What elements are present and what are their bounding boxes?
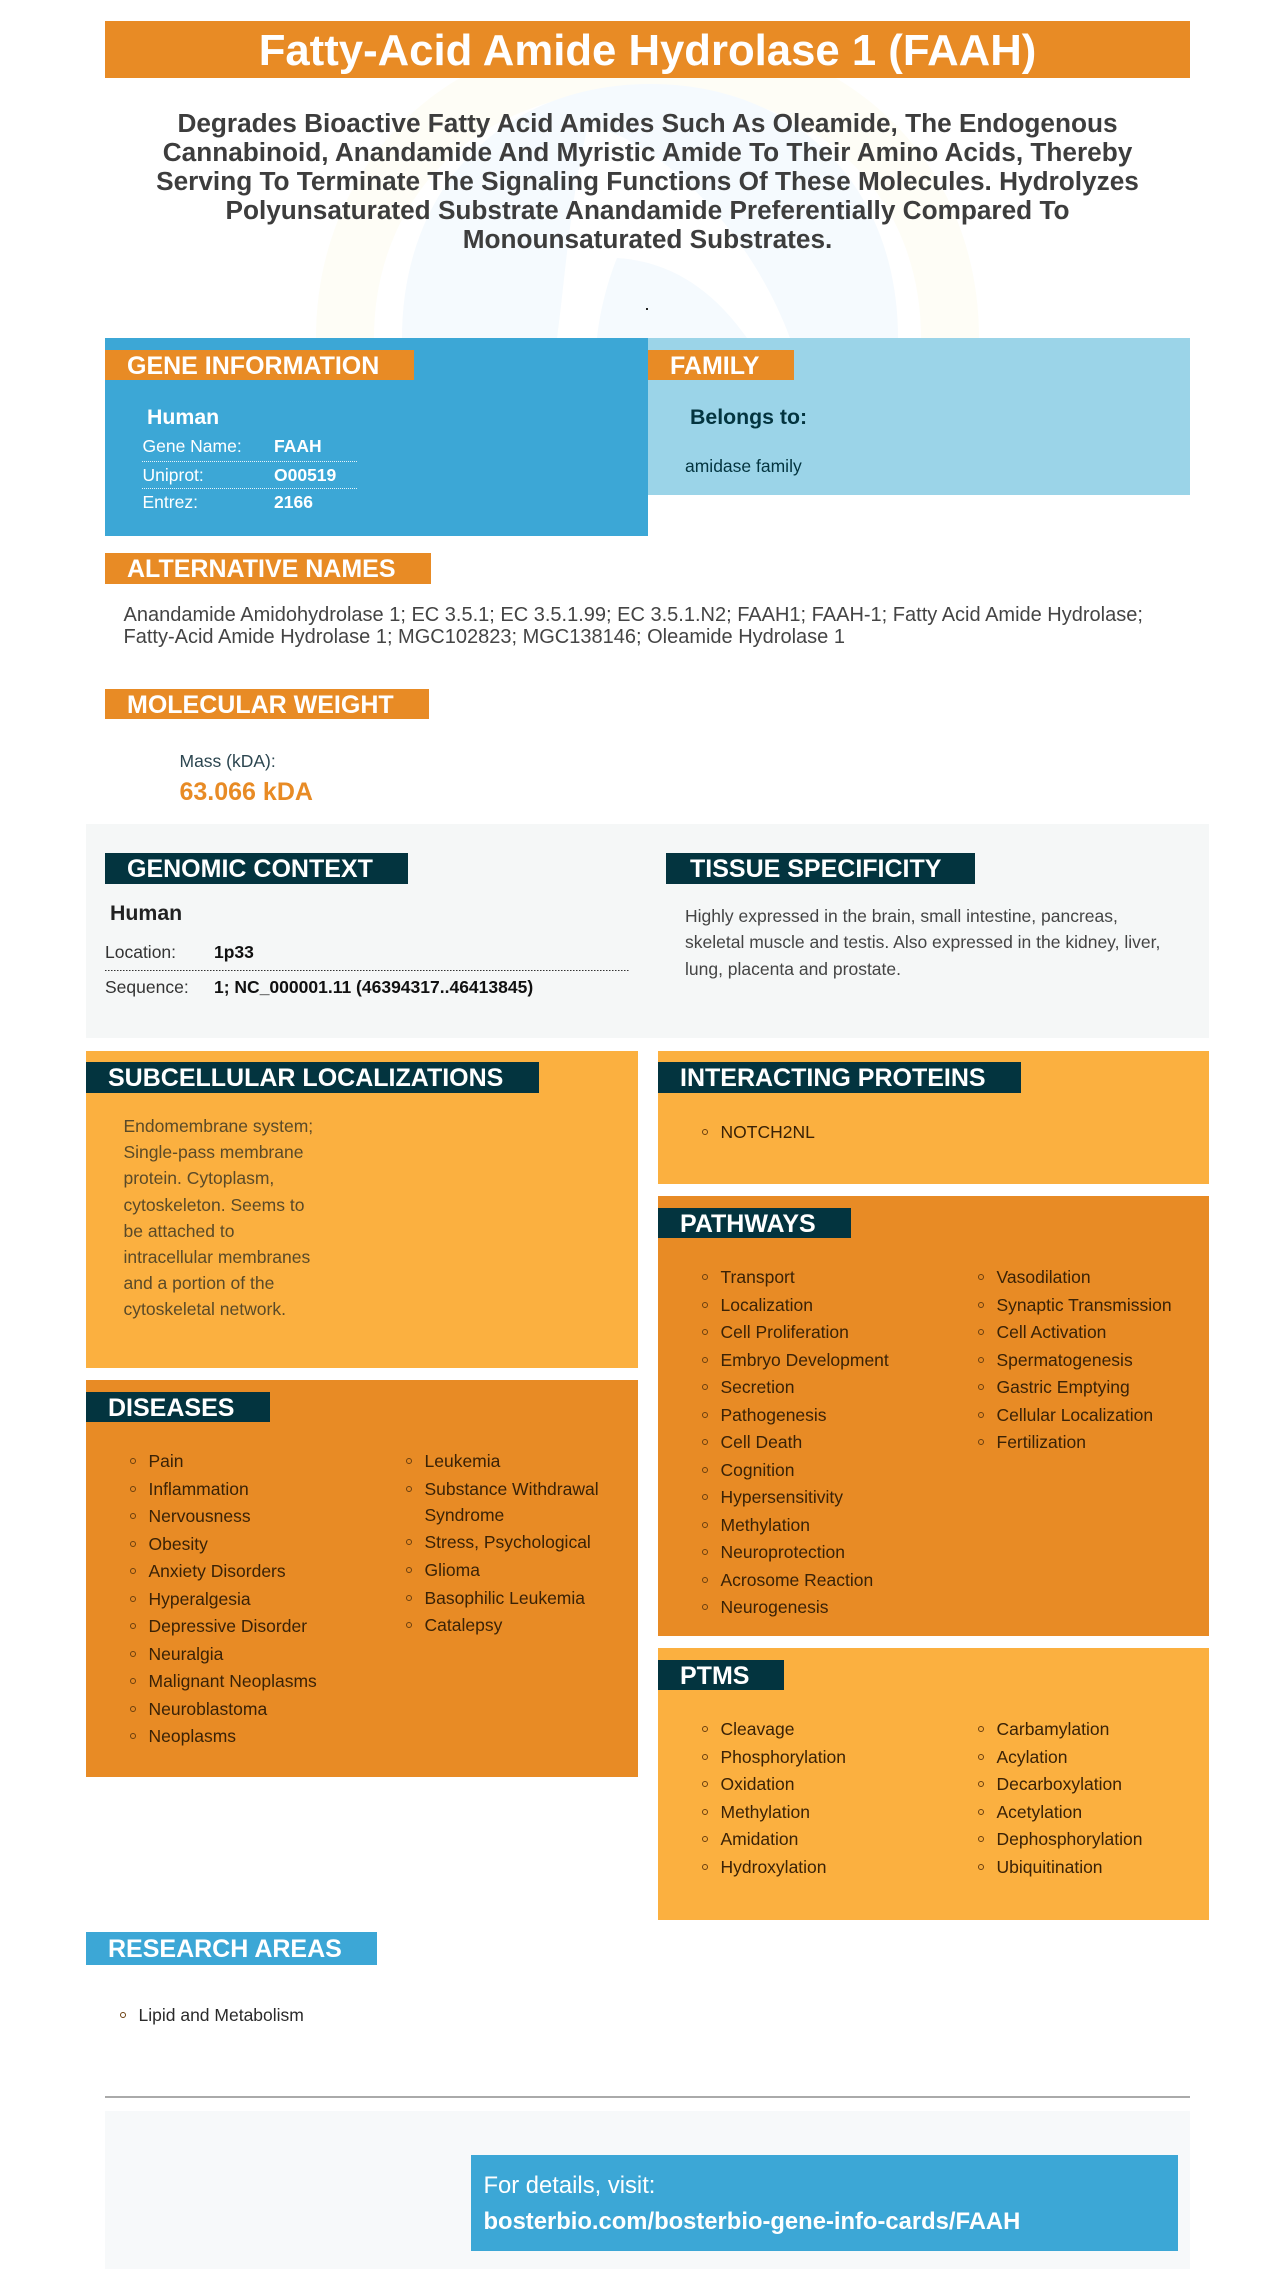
entrez row (142, 492, 313, 512)
alternative names text: Anandamide Amidohydrolase 1; EC 3.5.1; EC 3.5.1.99; EC 3.5.1.N2; FAAH1; FAAH-1; Fatty Acid Amide Hydrolase; (124, 604, 1143, 626)
diseases list column 2: Stress, Psychological (424, 1532, 591, 1552)
diseases list column 1: Neuroblastoma (148, 1698, 267, 1718)
pathways list column 1: Cell Death (720, 1432, 802, 1452)
diseases list column 1: Malignant Neoplasms (148, 1671, 317, 1691)
uniprot row: O00519 (274, 465, 336, 485)
description: Cannabinoid, Anandamide And Myristic Amide To Their Amino Acids, Thereby (163, 136, 1132, 166)
diseases list column 1: Inflammation (148, 1478, 249, 1498)
pathways list column 2: Cellular Localization (996, 1404, 1153, 1424)
panel: family (648, 338, 1190, 495)
pathways list column 2: Gastric Emptying (996, 1377, 1130, 1397)
heading: pathways (658, 1208, 851, 1238)
subcellular text: Single-pass membrane (124, 1142, 303, 1162)
diseases list column 2: Substance Withdrawal (424, 1478, 599, 1498)
ptms list column 1: Methylation (720, 1802, 810, 1822)
subcellular text (124, 1116, 313, 1319)
ptms list column 1: Hydroxylation (720, 1856, 827, 1876)
ptms list column 2: Decarboxylation (996, 1774, 1122, 1794)
pathways list column 1: Transport (720, 1267, 795, 1287)
link text: bosterbio.com/bosterbio-gene-info-cards/FAAH (484, 2208, 1020, 2235)
diseases list column 1: Depressive Disorder (148, 1616, 307, 1636)
alternative names text (124, 604, 1143, 648)
mass value: 63.066 kDA (180, 778, 313, 806)
heading: molecular weight: MOLECULAR WEIGHT (127, 690, 394, 718)
pathways list column 1: Pathogenesis (720, 1404, 827, 1424)
pathways list column 1: Methylation (720, 1514, 810, 1534)
panel: gene information (105, 338, 648, 536)
subcellular text: be attached to (124, 1221, 234, 1241)
gene name row (142, 436, 322, 456)
panel: diseases (86, 1380, 638, 1777)
heading: alternative names: ALTERNATIVE NAMES (127, 554, 396, 582)
sequence row: 1; NC_000001.11 (46394317..46413845) (214, 977, 533, 997)
ptms list column 2 (978, 1719, 1142, 1876)
description: Degrades Bioactive Fatty Acid Amides Such As Oleamide, The Endogenous (177, 108, 1118, 138)
diseases list column 1: Pain (148, 1451, 184, 1471)
ptms list column 1: Phosphorylation (720, 1746, 846, 1766)
heading: diseases (86, 1392, 270, 1422)
description (156, 108, 1139, 254)
pathways list column 2: Vasodilation (996, 1267, 1091, 1287)
diseases list column 2: Glioma (424, 1560, 480, 1580)
interacting list: NOTCH2NL (720, 1122, 815, 1142)
sequence row: Sequence: (105, 977, 189, 997)
subcellular text: cytoskeleton. Seems to (124, 1195, 304, 1215)
heading: tissue specificity: TISSUE SPECIFICITY (690, 854, 941, 882)
heading: family: FAMILY (670, 352, 759, 380)
ptms list column 1: Amidation (720, 1829, 798, 1849)
uniprot row (142, 465, 336, 485)
pathways list column 2: Synaptic Transmission (996, 1294, 1172, 1314)
pathways list column 1: Neurogenesis (720, 1597, 828, 1617)
subcellular text: intracellular membranes (124, 1247, 310, 1267)
research areas list: Lipid and Metabolism (138, 2005, 304, 2025)
diseases list column 1: Neuralgia (148, 1644, 223, 1664)
entrez row: 2166 (274, 492, 313, 512)
pathways list column 2 (978, 1267, 1172, 1452)
tissue text: skeletal muscle and testis. Also expressed in the kidney, liver, (685, 932, 1160, 952)
dot (646, 308, 648, 310)
diseases list column 1: Hyperalgesia (148, 1588, 251, 1608)
location row: 1p33 (214, 942, 254, 962)
pathways list column 1: Localization (720, 1294, 813, 1314)
diseases list column 1: Neoplasms (148, 1726, 236, 1746)
uniprot row: Uniprot: (142, 465, 204, 485)
heading: genomic context: GENOMIC CONTEXT (127, 854, 373, 882)
alternative names text: Fatty-Acid Amide Hydrolase 1; MGC102823; MGC138146; Oleamide Hydrolase 1 (124, 626, 845, 648)
gene name row: FAAH (274, 436, 322, 456)
panel: interacting proteins (658, 1051, 1209, 1184)
heading: subcellular localizations: SUBCELLULAR LOCALIZATIONS (108, 1064, 503, 1092)
ptms list column 2: Acylation (996, 1746, 1068, 1766)
diseases list column 1: Nervousness (148, 1506, 251, 1526)
diseases list column 2 (406, 1451, 599, 1635)
panel: footer (105, 2111, 1190, 2269)
description: Polyunsaturated Substrate Anandamide Preferentially Compared To (225, 194, 1070, 224)
pathways list column 1: Secretion (720, 1377, 794, 1397)
diseases list column 2: Leukemia (424, 1451, 500, 1471)
panel: subcellular localizations (86, 1051, 638, 1368)
pathways list column 1: Neuroprotection (720, 1542, 845, 1562)
panel: pathways (658, 1196, 1209, 1636)
ptms list column 1: Oxidation (720, 1774, 794, 1794)
title: Fatty-Acid Amide Hydrolase 1 (FAAH) (259, 26, 1036, 75)
heading: diseases: DISEASES (108, 1394, 234, 1422)
location row: Location: (105, 942, 176, 962)
pathways list column 2: Fertilization (996, 1432, 1086, 1452)
pathways list column 2: Spermatogenesis (996, 1350, 1133, 1370)
pathways list column 1 (702, 1267, 889, 1617)
pathways list column 1: Cognition (720, 1460, 794, 1480)
gene name row: Gene Name: (142, 436, 242, 456)
subcellular text: cytoskeletal network. (124, 1299, 286, 1319)
description: Monounsaturated Substrates. (463, 224, 832, 254)
ptms list column 1 (702, 1719, 846, 1876)
subcellular text: protein. Cytoplasm, (124, 1168, 274, 1188)
tissue text: lung, placenta and prostate. (685, 959, 901, 979)
pathways list column 1: Hypersensitivity (720, 1487, 843, 1507)
ptms list column 2: Acetylation (996, 1802, 1082, 1822)
diseases list column 1: Anxiety Disorders (148, 1561, 286, 1581)
subcellular text: and a portion of the (124, 1273, 274, 1293)
call to action: For details, visit: (484, 2172, 655, 2199)
panel: genomic context and tissue specificity (86, 824, 1209, 1038)
pathways list column 1: Cell Proliferation (720, 1322, 849, 1342)
diseases list column 2: Syndrome (424, 1504, 504, 1524)
diseases list column 1 (130, 1451, 317, 1746)
heading: ptms (658, 1660, 784, 1690)
ptms list column 2: Ubiquitination (996, 1856, 1103, 1876)
title (105, 21, 1190, 78)
belongs to: Belongs to: (690, 404, 807, 428)
tissue text (685, 906, 1160, 979)
family value: amidase family (685, 456, 802, 476)
background watermark logo (316, 78, 979, 338)
heading: pathways: PATHWAYS (680, 1210, 816, 1238)
heading: interacting proteins: INTERACTING PROTEINS (680, 1064, 986, 1092)
heading: ptms: PTMS (680, 1662, 749, 1690)
species: Human (110, 900, 182, 924)
pathways list column 1: Acrosome Reaction (720, 1570, 873, 1590)
mass label: Mass (kDA): (180, 751, 276, 771)
panel: ptms (658, 1648, 1209, 1920)
diseases list column 2: Basophilic Leukemia (424, 1588, 585, 1608)
entrez row: Entrez: (142, 492, 198, 512)
location row (105, 942, 254, 962)
ptms list column 2: Dephosphorylation (996, 1829, 1142, 1849)
heading: research areas: RESEARCH AREAS (108, 1934, 342, 1962)
ptms list column 1: Cleavage (720, 1719, 794, 1739)
heading: research areas (86, 1932, 377, 1965)
tissue text: Highly expressed in the brain, small intestine, pancreas, (685, 906, 1118, 926)
diseases list column 1: Obesity (148, 1534, 208, 1554)
heading: family (648, 350, 794, 380)
pathways list column 1: Embryo Development (720, 1350, 889, 1370)
subcellular text: Endomembrane system; (124, 1116, 313, 1136)
pathways list column 2: Cell Activation (996, 1322, 1106, 1342)
description: Serving To Terminate The Signaling Functions Of These Molecules. Hydrolyzes (156, 166, 1139, 196)
heading: gene information: GENE INFORMATION (127, 352, 379, 380)
species: Human (147, 404, 219, 428)
ptms list column 2: Carbamylation (996, 1719, 1109, 1739)
diseases list column 2: Catalepsy (424, 1615, 502, 1635)
callout: details link (471, 2155, 1178, 2251)
